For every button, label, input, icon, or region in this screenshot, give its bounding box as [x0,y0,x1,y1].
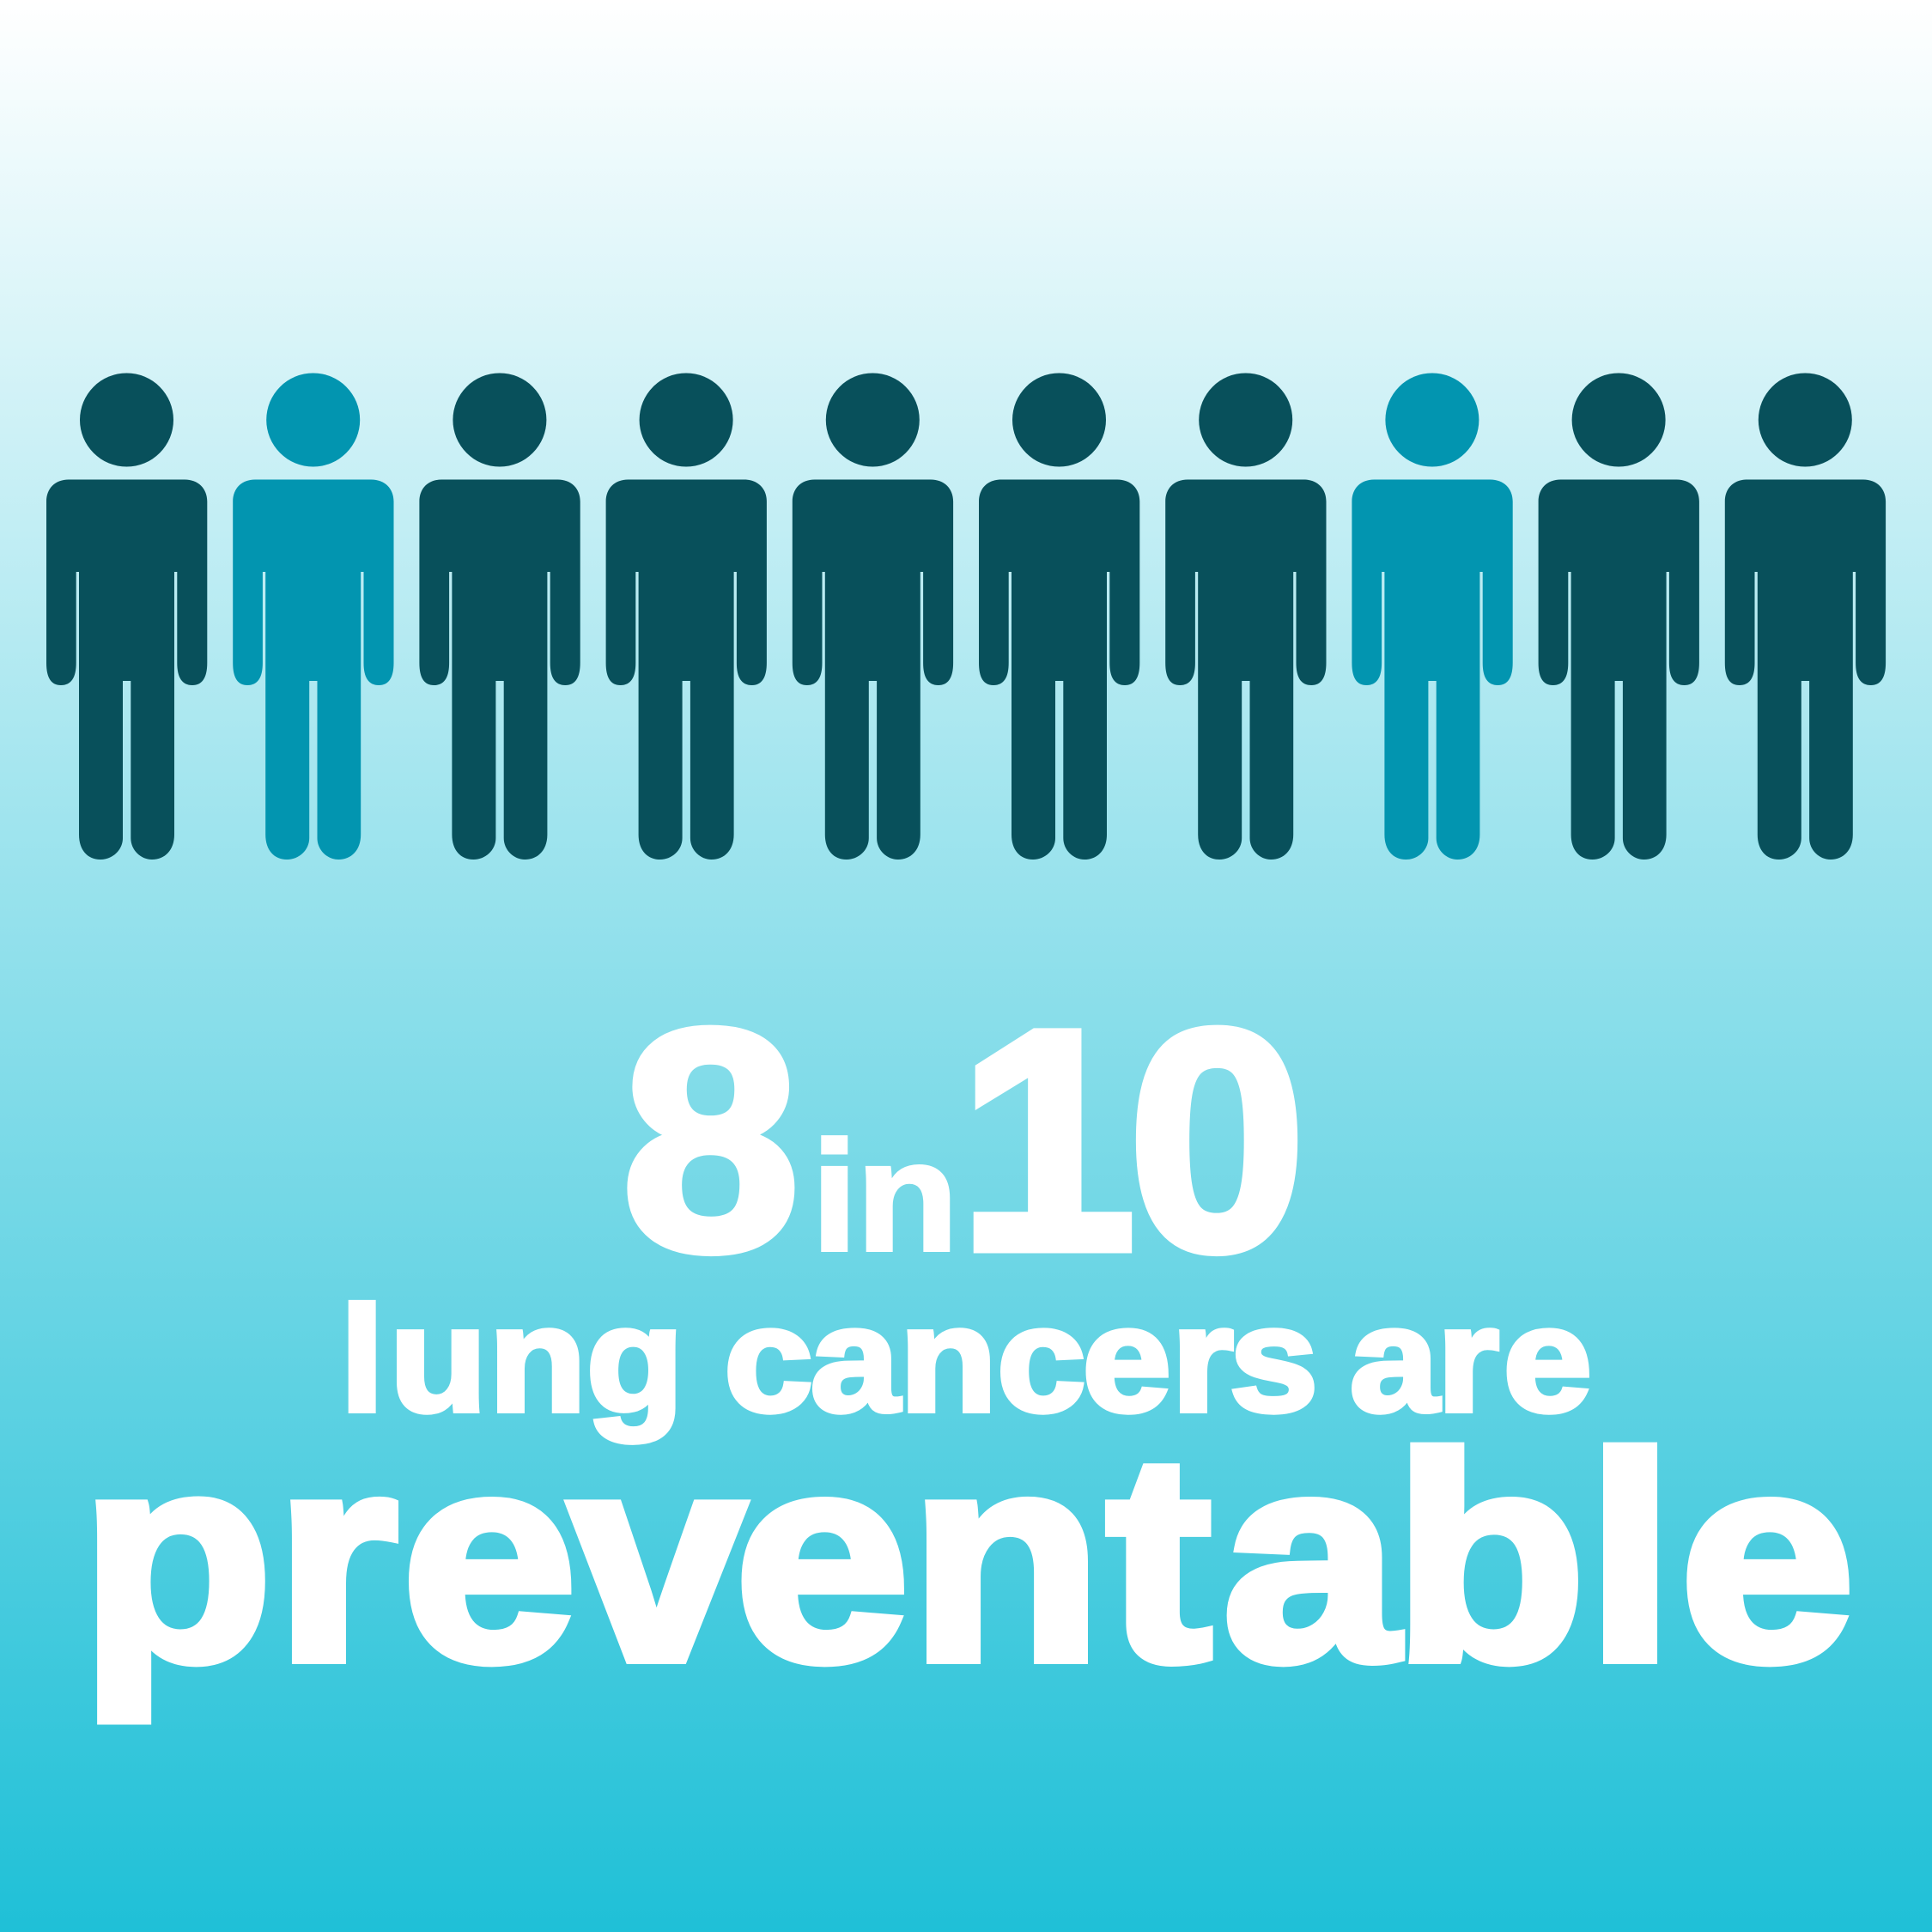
statistic: 8 in 10: in [811,1109,958,1284]
icon: person 2 highlighted [233,373,393,860]
icon: person 8 highlighted [1352,373,1513,860]
subheading: lung cancers are: lung cancers are [340,1277,1592,1443]
heading: preventable: preventable [81,1394,1855,1722]
statistic: 8 in 10: 8 [622,965,799,1315]
icon: person 10 dark [1725,373,1886,860]
icon: person 5 dark [793,373,953,860]
statistic: 8 in 10: 10 [958,965,1306,1315]
icon: person 7 dark [1165,373,1326,860]
icon: person 1 dark [46,373,207,860]
statistic: 8 in 10 [622,965,1306,1315]
icon: person 9 dark [1539,373,1699,860]
icon: person 4 dark [606,373,767,860]
icon: person 3 dark [419,373,580,860]
row of ten people icons [46,373,1886,860]
icon: person 6 dark [979,373,1139,860]
